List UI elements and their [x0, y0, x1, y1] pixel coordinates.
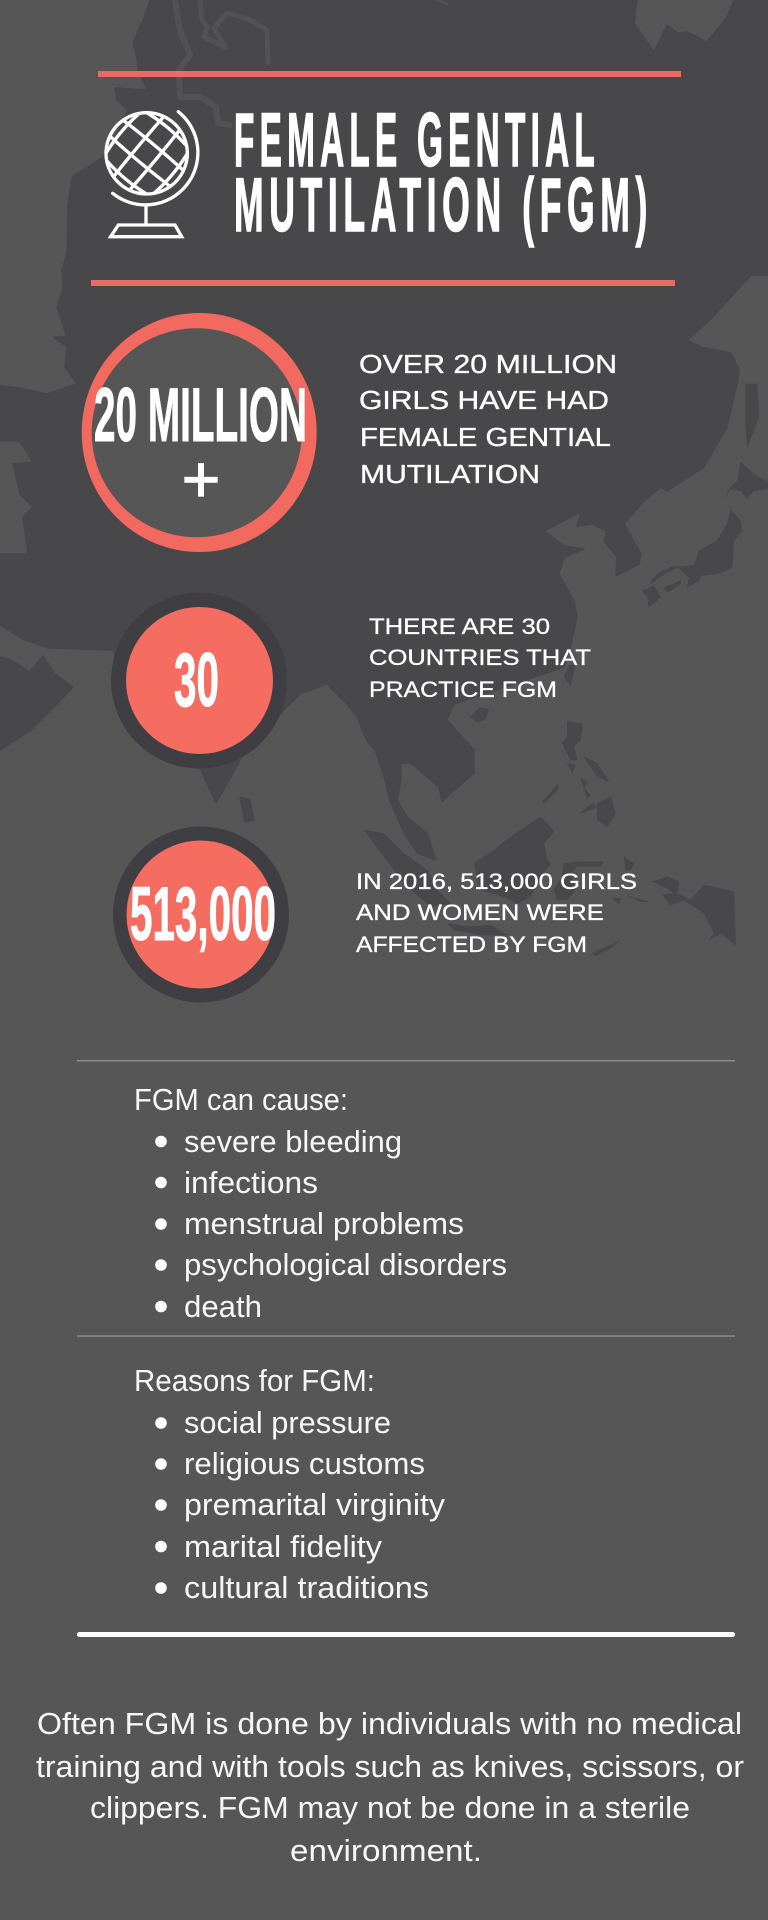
list items: marital fidelity: [184, 1529, 383, 1564]
dark ring: [113, 826, 289, 1002]
plus sign: +: [182, 442, 220, 516]
globe icon: [106, 112, 198, 237]
stat description: 20 million: [359, 349, 617, 489]
list items: psychological disorders: [184, 1247, 507, 1282]
stat description: 30 countries: PRACTICE FGM: [369, 677, 557, 702]
closing paragraph: clippers. FGM may not be done in a sterile: [90, 1790, 690, 1825]
list items: menstrual problems: [184, 1206, 464, 1241]
bottom title divider bar: [91, 280, 675, 286]
stat: 20 million: [82, 313, 317, 552]
list items: [184, 1124, 507, 1324]
stat description: 30 countries: [369, 614, 591, 702]
list: reasons for FGM: [134, 1363, 446, 1605]
list items: infections: [184, 1165, 318, 1200]
list items: severe bleeding: [184, 1124, 402, 1159]
stat: 30 countries: [111, 592, 287, 768]
coral ring: [82, 313, 317, 552]
bullets: [155, 1136, 167, 1312]
closing paragraph: environment.: [290, 1833, 482, 1868]
stat description: 513,000: AFFECTED BY FGM: [356, 932, 587, 957]
list items: death: [184, 1289, 262, 1324]
stat description: 30 countries: COUNTRIES THAT: [369, 645, 591, 670]
list items: social pressure: [184, 1405, 391, 1440]
ring inner fill: [92, 328, 302, 537]
stat description: 20 million: MUTILATION: [360, 459, 540, 489]
list items: [184, 1405, 446, 1605]
list: FGM can cause: [134, 1082, 507, 1324]
stat number: 513,000: [130, 872, 276, 957]
list items: cultural traditions: [184, 1570, 429, 1605]
closing paragraph: [36, 1706, 744, 1868]
coral disc: [126, 607, 273, 754]
title: [234, 98, 653, 248]
stat description: 30 countries: THERE ARE 30: [369, 614, 550, 639]
stat: 513,000: [113, 826, 289, 1002]
stat description: 20 million: GIRLS HAVE HAD: [359, 385, 609, 415]
closing paragraph: Often FGM is done by individuals with no medical: [37, 1706, 742, 1741]
stat description: 20 million: OVER 20 MILLION: [359, 349, 617, 379]
stat number: 20 MILLION: [94, 373, 307, 458]
stat description: 513,000: [356, 869, 637, 957]
coral disc: [126, 840, 274, 988]
top divider bar: [98, 71, 681, 77]
stat description: 513,000: IN 2016, 513,000 GIRLS: [356, 869, 637, 894]
bullets: [155, 1417, 167, 1594]
list items: religious customs: [184, 1446, 425, 1481]
dark ring: [111, 592, 287, 768]
background map of Asia: [0, 0, 768, 956]
list heading: Reasons for FGM:: [134, 1363, 375, 1398]
stat description: 513,000: AND WOMEN WERE: [356, 900, 604, 925]
list items: premarital virginity: [184, 1487, 446, 1522]
closing paragraph: training and with tools such as knives, scissors, or: [36, 1749, 744, 1784]
stat description: 20 million: FEMALE GENTIAL: [360, 422, 611, 452]
stat number: 30: [174, 638, 219, 723]
list heading: FGM can cause:: [134, 1082, 348, 1117]
